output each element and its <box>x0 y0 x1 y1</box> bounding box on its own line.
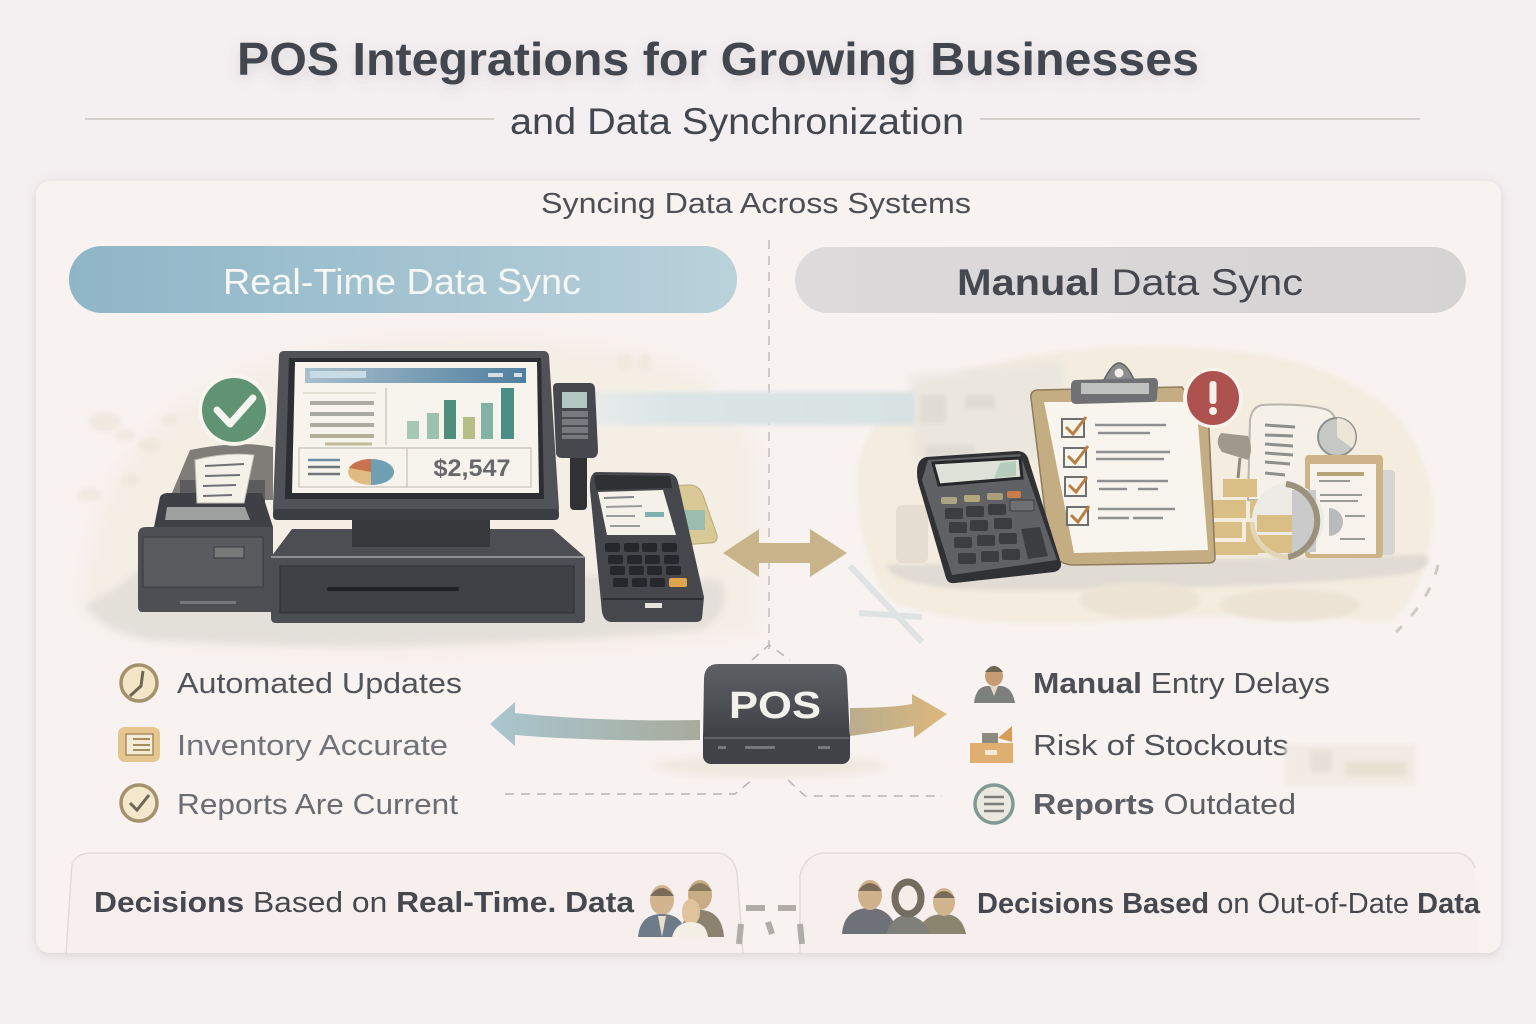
list: real-time benefits <box>118 665 462 821</box>
icon: green check badge <box>198 374 270 446</box>
item: reports outdated <box>975 785 1296 823</box>
item: manual entry delays: Manual Entry Delays <box>1033 668 1330 700</box>
printer <box>138 444 273 612</box>
POS box <box>703 664 850 764</box>
item: risk of stockouts: Risk of Stockouts <box>1033 730 1289 762</box>
main panel <box>36 181 1501 953</box>
item: inventory accurate <box>118 727 448 762</box>
background wash: right <box>857 347 1433 623</box>
panel heading: Syncing Data Across Systems <box>541 188 971 220</box>
stamp <box>1218 433 1251 478</box>
banner: manual data sync: Manual Data Sync <box>957 262 1303 303</box>
banner: manual data sync <box>795 247 1466 313</box>
faint wash beneath POS <box>655 755 885 777</box>
boxes <box>1212 479 1260 555</box>
arrow: POS to real-time <box>490 702 700 746</box>
background connection band <box>590 392 915 425</box>
illustration: manual records <box>917 363 1395 583</box>
POS dashed connectors <box>505 645 942 796</box>
item: reports outdated: Reports Outdated <box>1033 789 1296 821</box>
bar chart <box>407 388 514 439</box>
background wash: left <box>78 339 755 650</box>
illustration: POS system <box>138 351 717 623</box>
item: manual entry delays <box>974 666 1330 703</box>
item: risk of stockouts <box>970 726 1289 763</box>
faint cross mark <box>850 566 922 642</box>
center divider <box>768 240 770 650</box>
arrow: two-way sync <box>723 529 847 577</box>
monitor: $2,547 <box>434 455 510 482</box>
item: reports are current: Reports Are Current <box>177 789 458 821</box>
subtitle: and Data Synchronization <box>510 101 964 142</box>
document stack <box>1248 404 1395 558</box>
monitor <box>273 351 559 520</box>
item: automated updates <box>121 665 462 701</box>
faded card <box>1285 745 1415 785</box>
title: POS Integrations for Growing Businesses <box>237 33 1199 85</box>
icon: people <box>638 880 724 937</box>
panel: real-time decisions <box>66 853 743 953</box>
scanner <box>553 383 598 510</box>
panel: out-of-date decisions: Decisions Based on Out-of-Date Data <box>977 888 1481 920</box>
item: automated updates: Automated Updates <box>177 668 462 700</box>
pie chart <box>348 459 394 485</box>
banner: real-time data sync: Real-Time Data Sync <box>223 261 581 302</box>
banner: real-time data sync <box>69 246 737 313</box>
POS box: POS <box>729 685 821 727</box>
card reader <box>590 472 717 622</box>
list: manual drawbacks <box>970 666 1330 823</box>
magnifier <box>1252 483 1324 557</box>
clipboard <box>1031 363 1215 565</box>
icon: people with magnifier <box>842 880 966 934</box>
item: reports are current <box>121 785 458 821</box>
panel: real-time decisions: Decisions Based on Real-Time. Data <box>94 887 635 919</box>
clip <box>1071 363 1158 404</box>
panel: out-of-date decisions <box>800 853 1481 953</box>
arrow: POS to manual <box>850 694 947 738</box>
faint dashes <box>1396 565 1438 632</box>
calculator <box>917 451 1061 583</box>
icon: red alert badge <box>1183 368 1243 428</box>
item: inventory accurate: Inventory Accurate <box>177 730 448 762</box>
bottom connector <box>739 908 802 944</box>
cash drawer <box>271 518 585 623</box>
